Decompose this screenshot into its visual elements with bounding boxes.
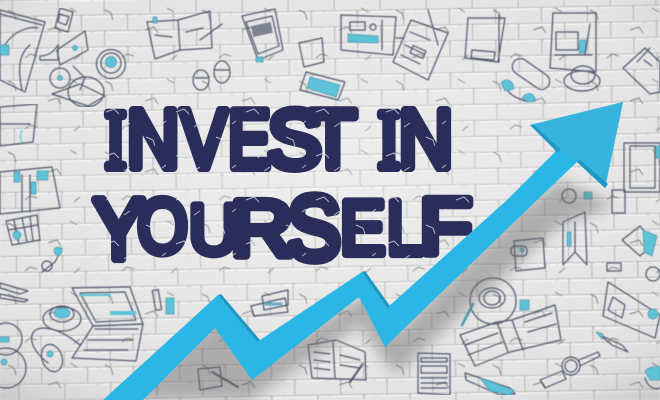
icon: coffee cup bbox=[43, 306, 81, 331]
title line 1: T bbox=[309, 92, 356, 185]
icon: planner with cyan tabs bbox=[0, 167, 60, 214]
title line 1: I bbox=[378, 94, 400, 186]
icon: notebook left bbox=[0, 104, 37, 146]
arrow body bbox=[103, 102, 623, 400]
icon: tablet and pen bbox=[198, 367, 238, 390]
icon: flower and plate bbox=[50, 66, 105, 107]
icon: stack of papers bbox=[242, 9, 283, 62]
title line 1: E bbox=[228, 92, 271, 185]
icon: mouse bbox=[32, 328, 80, 375]
icon: plate and spoon bbox=[462, 278, 516, 325]
growth arrow bbox=[103, 102, 623, 400]
icon: open book with pen bbox=[147, 11, 222, 59]
title line 1: N bbox=[127, 92, 179, 186]
title line 2: Y bbox=[93, 182, 144, 277]
icon: cyan clip bottom right bbox=[645, 366, 660, 389]
icon: tablet bbox=[299, 38, 324, 67]
icon: notebook top left bbox=[0, 10, 45, 92]
doodle icons: sides and bottom bbox=[0, 104, 660, 395]
icon: clip bbox=[42, 247, 62, 272]
icon: small cutter bbox=[596, 332, 628, 352]
title line 1: V bbox=[181, 94, 227, 186]
icon: device with cyan bar bbox=[341, 15, 404, 55]
icon: cyan headphones bbox=[501, 80, 535, 102]
title line 1 bbox=[105, 92, 453, 186]
icon: lipstick and bottle bbox=[152, 290, 174, 314]
doodle icons: top row bbox=[0, 8, 660, 107]
title line 2: U bbox=[189, 191, 239, 269]
title line 2: E bbox=[340, 186, 385, 271]
title line 2 bbox=[93, 178, 472, 278]
icon: open book bbox=[308, 340, 366, 382]
arrow head face bbox=[530, 102, 623, 188]
icon: jars at arrow bbox=[562, 189, 625, 213]
icon: book top right bbox=[623, 48, 660, 94]
title: INVEST IN / YOURSELF bbox=[90, 92, 480, 278]
title line 2: F bbox=[419, 182, 472, 271]
title line 1: N bbox=[399, 92, 453, 185]
icon: laptop bbox=[72, 287, 143, 361]
icon: salt jars bbox=[193, 61, 230, 90]
icon: open planner bbox=[460, 300, 561, 366]
icon: wallet bbox=[511, 238, 545, 271]
icon: notebook with rings bbox=[465, 15, 505, 62]
icon: cyan bag bbox=[607, 226, 660, 281]
icon: phone bbox=[55, 8, 73, 32]
title line 1: S bbox=[268, 94, 322, 186]
icon: panel right bbox=[624, 143, 660, 192]
title line 2: O bbox=[137, 185, 188, 270]
icon: open device right bbox=[603, 282, 660, 338]
title line 1: I bbox=[105, 93, 126, 186]
icon: cups bottom left bbox=[0, 323, 26, 388]
icon: box cutter bbox=[465, 373, 515, 395]
icon: cards bbox=[251, 290, 288, 316]
icon: bag and shoe bbox=[40, 31, 88, 65]
icon: calendar bbox=[6, 215, 40, 245]
title line 2: L bbox=[387, 186, 423, 271]
icon: clipboard with pen bbox=[393, 10, 448, 80]
icon: calculator bbox=[418, 353, 450, 395]
arrow shadow bbox=[125, 180, 615, 400]
title line 2: R bbox=[230, 185, 293, 273]
icon: pens bbox=[0, 283, 28, 302]
title line 2: S bbox=[288, 178, 341, 278]
icon: wristwatch bbox=[540, 352, 600, 388]
icon: glasses case bbox=[509, 55, 553, 93]
wear cracks over lettering bbox=[90, 100, 480, 270]
icon: phone cyan bbox=[300, 72, 345, 100]
icon: coffee cup from above bbox=[96, 50, 126, 78]
icon: big paper with pen and cup bbox=[550, 13, 600, 91]
icon: folding brochure bbox=[563, 212, 587, 265]
arrow darker bevels bbox=[218, 125, 608, 342]
